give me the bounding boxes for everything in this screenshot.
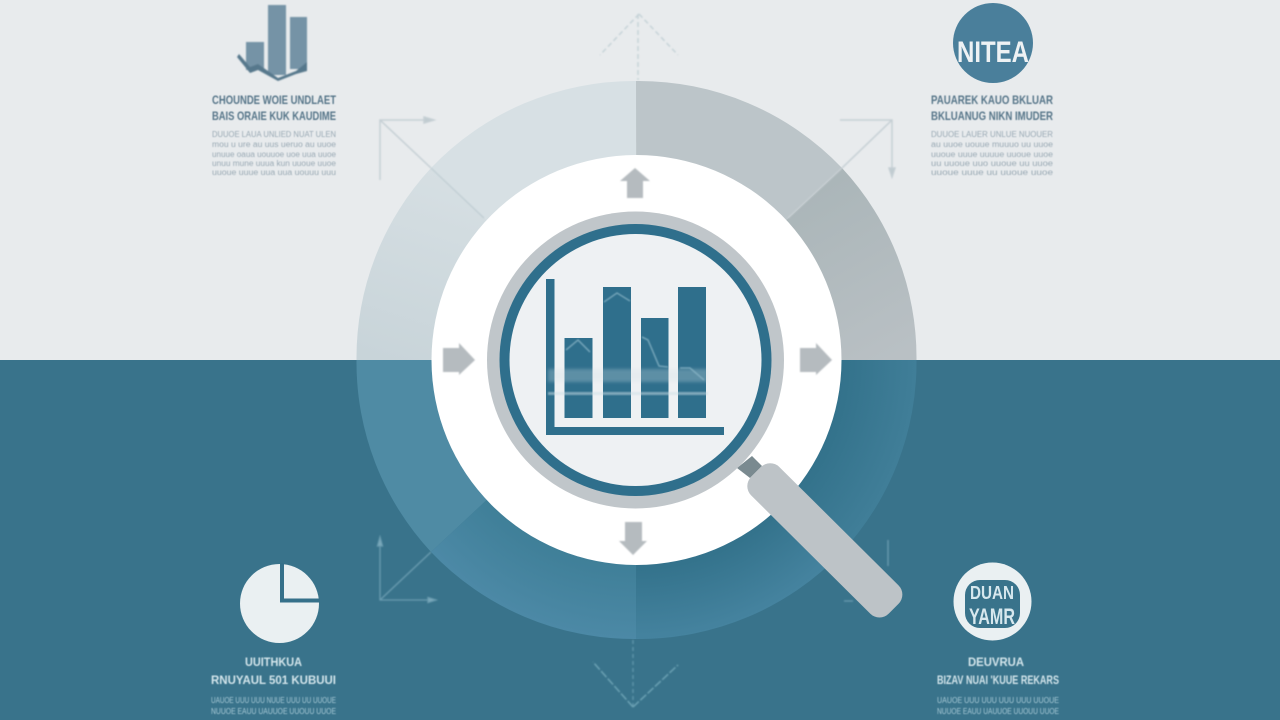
arrow: up bbox=[620, 168, 650, 198]
guide arrow: top left bbox=[380, 117, 434, 180]
text block: top right: BKLUANUG NIKN IMUDER bbox=[931, 111, 1054, 123]
icon: NITEA badge bbox=[953, 3, 1033, 83]
pie slice separator bbox=[282, 563, 320, 600]
body copy: unuu mune uuua kun uuoue uuoe bbox=[212, 159, 337, 168]
segment: right lower bbox=[636, 360, 917, 552]
arrow: left bbox=[443, 343, 475, 375]
guide arrow: top centre bbox=[600, 14, 678, 80]
background: lower teal band bbox=[0, 360, 1280, 720]
body copy: DUUOE LAUER UNLUE NUOUER bbox=[931, 130, 1053, 139]
ring of eight segments bbox=[356, 81, 917, 639]
icon bar short bbox=[246, 42, 264, 70]
dotted band across bars bbox=[548, 392, 708, 395]
body copy: NUUOE EAUU UAUUOE UUOUU UUOE bbox=[937, 707, 1059, 716]
badge text: NITEA bbox=[957, 36, 1029, 69]
segment: right upper bbox=[636, 168, 917, 360]
text block: bottom left bbox=[211, 657, 336, 716]
heading: CHOUNDE WOIE UNDLAET bbox=[212, 95, 336, 107]
segment: bottom left bbox=[431, 360, 636, 639]
lens teal ring bbox=[500, 224, 772, 496]
heading: DEUVRUA bbox=[968, 657, 1024, 669]
stamp disc bbox=[954, 562, 1032, 640]
chart x axis bbox=[546, 427, 724, 435]
guide arrow: top right bbox=[840, 120, 895, 177]
chart bar 3 bbox=[641, 318, 668, 418]
badge circle bbox=[953, 3, 1033, 83]
body copy bbox=[211, 696, 336, 716]
icon trend line bbox=[237, 54, 307, 81]
trend line over bars bbox=[566, 293, 704, 380]
body copy: uuoue uuue uua uua uouuu uuu bbox=[212, 168, 336, 177]
text block: top left: BAIS ORAIE KUK KAUDIME bbox=[212, 111, 336, 123]
body copy bbox=[212, 130, 337, 177]
guide arrow: bottom centre bbox=[593, 640, 678, 707]
chart bar 2 bbox=[603, 287, 631, 418]
translucent band across bars bbox=[548, 369, 708, 382]
segment: top right bbox=[636, 81, 842, 360]
arrow: down bbox=[619, 522, 647, 555]
body copy: UAUOE UUU UUU UUU UUU UUOUE bbox=[937, 696, 1059, 705]
body copy: uuoue uuue uuuue uuoue uuoe bbox=[931, 150, 1054, 159]
body copy: unuue oaua uouuoe uoe uua uuoe bbox=[212, 150, 337, 159]
segment: bottom right bbox=[636, 360, 842, 639]
body copy: NUUOE EAUU UAUUOE UUOUU UUOE bbox=[211, 707, 336, 716]
icon: circular stamp: YAMR bbox=[969, 604, 1015, 629]
segment: left lower bbox=[356, 360, 636, 552]
magnifying glass bbox=[487, 212, 908, 623]
body copy: mou u ure au uus ueruo au uuoe bbox=[212, 140, 337, 149]
bar chart inside lens bbox=[546, 279, 724, 435]
text block: bottom right bbox=[937, 657, 1059, 716]
icon: bar chart top left bbox=[237, 5, 307, 81]
text block: top left bbox=[212, 95, 337, 177]
magnifier handle bbox=[742, 458, 908, 623]
lens rim bbox=[487, 212, 784, 508]
arrow: right bbox=[800, 343, 832, 375]
body copy: au uuoe uouue muuuo uu uuoe bbox=[931, 140, 1054, 149]
icon bar tall bbox=[268, 5, 286, 75]
background: upper light band bbox=[0, 0, 1280, 360]
guide arrow: bottom right bbox=[844, 540, 888, 601]
body copy: UAUOE UUU UUU NUUE UUU UU UUOUE bbox=[211, 696, 336, 705]
body copy: uuoue uuue uu uuoue uuoe bbox=[931, 168, 1054, 177]
text block: bottom right: BIZAV NUAI 'KUUE REKARS bbox=[937, 675, 1059, 687]
body copy bbox=[937, 696, 1059, 716]
icon: circular stamp bbox=[954, 562, 1032, 640]
body copy bbox=[931, 130, 1054, 177]
heading: PAUAREK KAUO BKLUAR bbox=[931, 95, 1054, 107]
guide arrow: bottom left bbox=[378, 537, 436, 602]
stamp inner teal area bbox=[965, 580, 1020, 628]
white central disc bbox=[432, 155, 842, 565]
segment: left upper bbox=[356, 168, 636, 360]
body copy: uu uuoue uuo uuoue uu uuoe bbox=[931, 159, 1054, 168]
stamp text: DUAN bbox=[970, 583, 1014, 603]
text block: top right bbox=[931, 95, 1054, 177]
icon: pie chart bbox=[240, 563, 320, 643]
pie body bbox=[240, 564, 319, 643]
magnifier handle connector bbox=[737, 456, 762, 478]
icon bar medium bbox=[290, 17, 307, 69]
chart bar 4 bbox=[678, 287, 706, 418]
chart bar 1 bbox=[564, 338, 592, 418]
segment: top left bbox=[431, 81, 636, 360]
heading: UUITHKUA bbox=[245, 657, 302, 669]
lens glass bbox=[510, 234, 762, 486]
chart y axis bbox=[546, 279, 554, 435]
body copy: DUUOE LAUA UNLIED NUAT ULEN bbox=[212, 130, 336, 139]
text block: bottom left: RNUYAUL 501 KUBUUI bbox=[211, 675, 336, 687]
